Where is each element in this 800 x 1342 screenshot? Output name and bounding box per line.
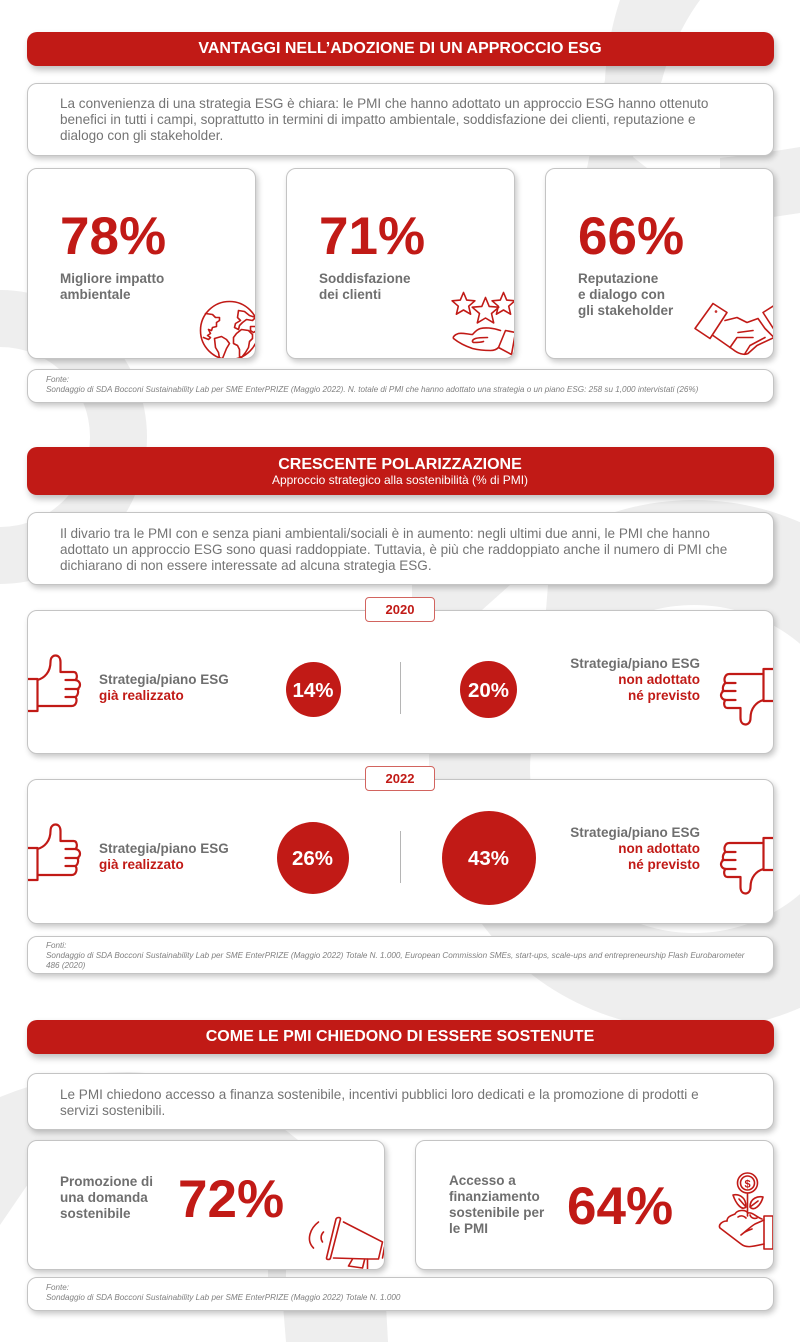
divider 2020 [400, 662, 401, 714]
panel: stat 78% [26, 168, 256, 358]
divider 2022 [400, 831, 401, 883]
intro panel: vantaggi [26, 82, 774, 156]
label: accesso: Accesso a [449, 1173, 516, 1188]
label: reputazione: e dialogo con [578, 287, 665, 302]
label: non adottato 2022: non adottato [618, 841, 700, 856]
source panel: vantaggi [26, 369, 774, 402]
source text: sostegno: Sondaggio di SDA Bocconi Sustainability Lab per SME EnterPRIZE (Maggio 2022) Totale N. 1.000 [46, 1293, 400, 1302]
label: soddisfazione [319, 271, 411, 302]
bubble: 26% [276, 822, 348, 894]
value: 72%: 72% [178, 1170, 284, 1229]
bubble: 26%: 26% [292, 847, 333, 870]
year badge: 2022: 2022 [386, 771, 414, 786]
label: reputazione: Reputazione [578, 271, 658, 286]
intro text: sostegno: Le PMI chiedono accesso a finanza sostenibile, incentivi pubblici loro dedicati e la promozione di prodotti e [60, 1087, 699, 1102]
source text: sostegno: Fonte: [46, 1283, 69, 1292]
icon: stars and hand [451, 292, 514, 356]
icon: megaphone [308, 1216, 384, 1269]
label: reputazione [578, 271, 674, 318]
label: promozione [60, 1174, 153, 1221]
intro text: sostegno: servizi sostenibili. [60, 1103, 165, 1118]
label: non adottato 2022: Strategia/piano ESG [570, 825, 700, 840]
icon: plant in hand [718, 1172, 773, 1250]
value: 64%: 64% [567, 1177, 673, 1236]
bubble: 14%: 14% [292, 678, 334, 702]
source text: polarizzazione [46, 941, 745, 970]
label: soddisfazione: dei clienti [319, 287, 381, 302]
year badge: 2020 [365, 597, 435, 622]
label: realizzato 2020 [99, 672, 229, 703]
label: accesso [449, 1173, 544, 1236]
icon: plant in hand: $ [744, 1178, 751, 1190]
icons: thumbs 2020 [28, 654, 773, 726]
bubble: 43%: 43% [468, 847, 509, 870]
label: realizzato 2022: Strategia/piano ESG [99, 841, 229, 856]
source text: sostegno [46, 1283, 400, 1302]
intro text: polarizzazione: adottato un approccio ESG sono quasi raddoppiate. Tuttavia, è più che raddoppiato anche il numero di PMI che [60, 542, 727, 557]
bubble: 43% [442, 811, 536, 905]
label: accesso: le PMI [449, 1221, 488, 1236]
label: realizzato 2022: già realizzato [99, 857, 184, 872]
label: promozione: una domanda [60, 1190, 148, 1205]
source text: polarizzazione: Fonti: [46, 941, 66, 950]
source text: vantaggi: Sondaggio di SDA Bocconi Sustainability Lab per SME EnterPRIZE (Maggio 2022). N. totale di PMI che hanno adottato una strategia o un piano ESG: 258 su 1,000 intervistati (26%) [46, 385, 698, 394]
label: accesso: sostenibile per [449, 1205, 544, 1220]
panel: stat 72% [26, 1140, 385, 1270]
label: non adottato 2020: non adottato [618, 672, 700, 687]
label: migliore impatto [60, 271, 164, 302]
intro text: polarizzazione: dichiarano di non essere interessate ad alcuna strategia ESG. [60, 558, 432, 573]
intro panel: polarizzazione [26, 512, 774, 585]
source text: polarizzazione: Sondaggio di SDA Bocconi Sustainability Lab per SME EnterPRIZE (Maggio 2022) Totale N. 1.000, European Commission SMEs, start-ups, scale-ups and entrepreneurship Flash Eurobarometer [46, 951, 745, 960]
label: accesso: finanziamento [449, 1189, 540, 1204]
label: migliore impatto: Migliore impatto [60, 271, 164, 286]
icon: handshake [694, 302, 773, 356]
panel: stat 64% [415, 1140, 774, 1270]
bubble: 14% [286, 662, 340, 716]
label: non adottato 2020 [570, 656, 700, 703]
label: reputazione: gli stakeholder [578, 303, 673, 318]
intro text: polarizzazione [60, 526, 727, 573]
intro text: vantaggi: dialogo con gli stakeholder. [60, 128, 223, 143]
panel: stat 66% [545, 168, 774, 358]
source text: polarizzazione: 486 (2020) [46, 961, 85, 970]
intro text: sostegno [60, 1087, 699, 1118]
label: non adottato 2020: Strategia/piano ESG [570, 656, 700, 671]
intro text: vantaggi: La convenienza di una strategia ESG è chiara: le PMI che hanno adottato un approccio ESG hanno ottenuto [60, 96, 708, 111]
intro panel: sostegno [26, 1073, 774, 1130]
year badge: 2022 [365, 766, 435, 791]
value: 66%: 66% [578, 207, 684, 266]
label: promozione: Promozione di [60, 1174, 153, 1189]
label: non adottato 2022: né previsto [628, 857, 700, 872]
section header: sostegno: COME LE PMI CHIEDONO DI ESSERE SOSTENUTE [206, 1028, 594, 1045]
label: realizzato 2022 [99, 841, 229, 872]
section header: vantaggi [26, 32, 774, 66]
intro text: vantaggi [60, 96, 708, 143]
label: migliore impatto: ambientale [60, 287, 131, 302]
subtitle: Approccio strategico alla sostenibilità (% di PMI) [272, 473, 528, 487]
section header: vantaggi: VANTAGGI NELL’ADOZIONE DI UN APPROCCIO ESG [198, 40, 602, 57]
bubble: 20% [460, 660, 517, 718]
intro text: vantaggi: benefici in tutti i campi, soprattutto in termini di impatto ambientale, soddisfazione dei clienti, reputazione e [60, 112, 696, 127]
section header: sostegno [26, 1020, 774, 1054]
year badge: 2020: 2020 [386, 602, 414, 617]
section header: polarizzazione: CRESCENTE POLARIZZAZIONE [278, 456, 522, 473]
label: non adottato 2020: né previsto [628, 688, 700, 703]
intro text: polarizzazione: Il divario tra le PMI con e senza piani ambientali/sociali è in aumento: negli ultimi due anni, le PMI che hanno [60, 526, 710, 541]
icons: thumbs 2022 [28, 823, 773, 895]
icon: globe [200, 300, 255, 358]
value: 71%: 71% [319, 207, 425, 266]
panel: 2022 [26, 779, 774, 924]
label: realizzato 2020: Strategia/piano ESG [99, 672, 229, 687]
label: non adottato 2022 [570, 825, 700, 872]
panel: stat 71% [286, 168, 514, 358]
bubble: 20%: 20% [468, 678, 509, 702]
panel: 2020 [26, 610, 774, 754]
label: soddisfazione: Soddisfazione [319, 271, 411, 286]
label: promozione: sostenibile [60, 1206, 131, 1221]
section header: polarizzazione [26, 447, 774, 495]
value: 78%: 78% [60, 207, 166, 266]
source panel: sostegno [26, 1277, 774, 1310]
source text: vantaggi: Fonte: [46, 375, 69, 384]
source text: vantaggi [46, 375, 698, 394]
source panel: polarizzazione [26, 936, 774, 974]
label: realizzato 2020: già realizzato [99, 688, 184, 703]
